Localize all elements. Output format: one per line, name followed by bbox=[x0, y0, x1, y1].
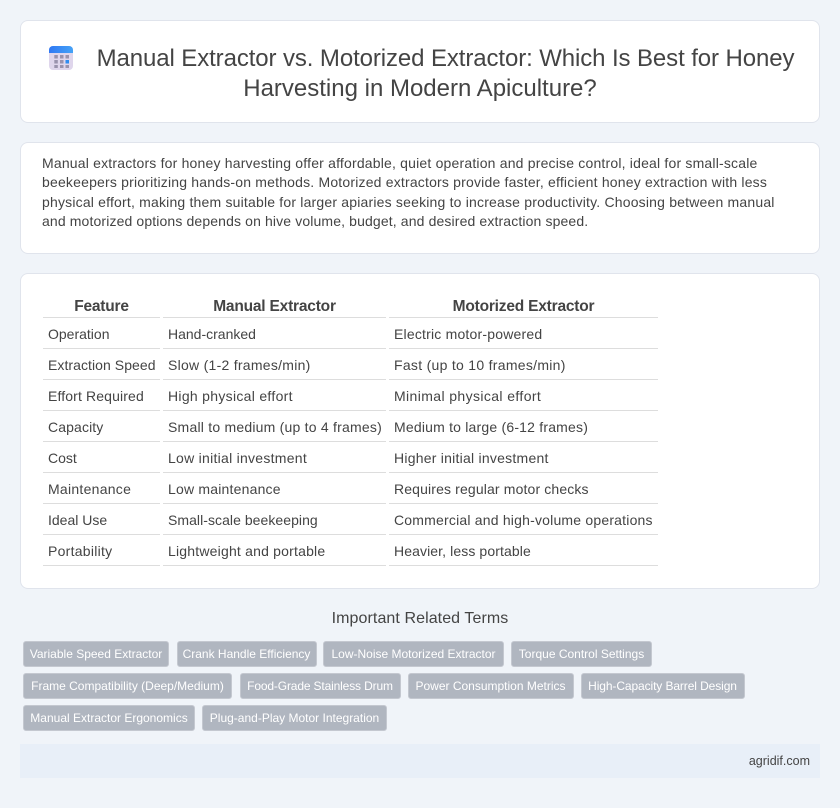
comparison table: Operation bbox=[48, 326, 109, 342]
comparison table: Low maintenance bbox=[168, 481, 281, 497]
related term tags: Plug-and-Play Motor Integration bbox=[210, 711, 379, 725]
footer bar bbox=[20, 744, 820, 778]
panel: title card bbox=[20, 20, 820, 123]
comparison table: Higher initial investment bbox=[394, 450, 549, 466]
intro text: beekeepers prioritizing hands-on methods. Motorized extractors provide faster, efficient honey extraction with less bbox=[42, 174, 767, 190]
related term tags: Food-Grade Stainless Drum bbox=[247, 679, 393, 693]
related term tags: Torque Control Settings bbox=[519, 647, 644, 661]
comparison table: Lightweight and portable bbox=[168, 543, 325, 559]
intro text: Manual extractors for honey harvesting offer affordable, quiet operation and precise control, ideal for small-scale bbox=[42, 155, 758, 171]
comparison table: Effort Required bbox=[48, 388, 144, 404]
related term tags: Power Consumption Metrics bbox=[415, 679, 566, 693]
comparison table bbox=[43, 298, 658, 566]
comparison table: Heavier, less portable bbox=[394, 543, 531, 559]
comparison table: Hand-cranked bbox=[168, 326, 256, 342]
intro text: and motorized options depends on hive volume, budget, and desired extraction speed. bbox=[42, 213, 588, 229]
related term tags: Low-Noise Motorized Extractor bbox=[331, 647, 496, 661]
related term tags: Frame Compatibility (Deep/Medium) bbox=[31, 679, 224, 693]
comparison table: Commercial and high-volume operations bbox=[394, 512, 653, 528]
panel: intro card bbox=[20, 142, 820, 254]
footer source: agridif.com bbox=[749, 754, 810, 768]
title: Manual Extractor vs. Motorized Extractor: Which Is Best for Honey bbox=[97, 45, 794, 72]
comparison table: Ideal Use bbox=[48, 512, 107, 528]
comparison table: Electric motor-powered bbox=[394, 326, 542, 342]
icon: calendar bbox=[49, 46, 73, 70]
intro text: physical effort, making them suitable for larger apiaries seeking to increase productivity. Choosing between manual bbox=[42, 194, 775, 210]
related term tags bbox=[23, 641, 745, 731]
comparison table: Small-scale beekeeping bbox=[168, 512, 318, 528]
intro text bbox=[42, 155, 775, 229]
comparison table: Motorized Extractor bbox=[453, 298, 594, 315]
comparison table: Medium to large (6-12 frames) bbox=[394, 419, 588, 435]
title bbox=[97, 45, 794, 102]
comparison table: Small to medium (up to 4 frames) bbox=[168, 419, 382, 435]
comparison table: Extraction Speed bbox=[48, 357, 156, 373]
comparison table: Capacity bbox=[48, 419, 103, 435]
comparison table: Manual Extractor bbox=[213, 298, 336, 315]
comparison table: Fast (up to 10 frames/min) bbox=[394, 357, 566, 373]
comparison table: Slow (1-2 frames/min) bbox=[168, 357, 311, 373]
comparison table: Minimal physical effort bbox=[394, 388, 541, 404]
comparison table: Cost bbox=[48, 450, 77, 466]
comparison table: Low initial investment bbox=[168, 450, 307, 466]
related term tags: Manual Extractor Ergonomics bbox=[30, 711, 188, 725]
comparison table: Requires regular motor checks bbox=[394, 481, 589, 497]
related term tags: High-Capacity Barrel Design bbox=[588, 679, 737, 693]
title: Harvesting in Modern Apiculture? bbox=[243, 75, 597, 102]
related term tags: Crank Handle Efficiency bbox=[183, 647, 310, 661]
panel: comparison table card bbox=[20, 273, 820, 589]
comparison table: Portability bbox=[48, 543, 112, 559]
related term tags: Variable Speed Extractor bbox=[30, 647, 162, 661]
comparison table: Feature bbox=[74, 298, 129, 315]
comparison table: Maintenance bbox=[48, 481, 131, 497]
heading: related terms: Important Related Terms bbox=[332, 610, 508, 627]
comparison table: High physical effort bbox=[168, 388, 293, 404]
